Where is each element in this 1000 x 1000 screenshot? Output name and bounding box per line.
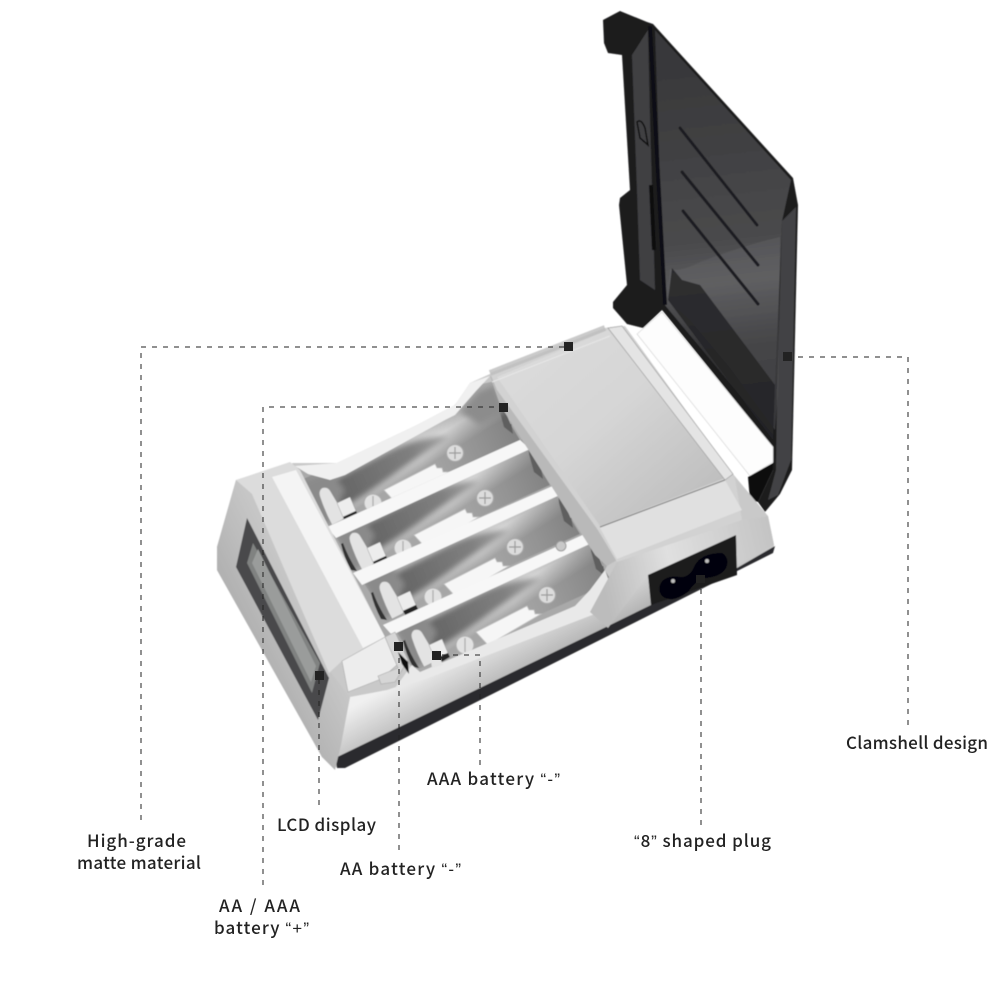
top wall	[295, 376, 490, 480]
callout: AA battery minus	[340, 642, 461, 880]
white contact tab lower-left	[430, 650, 443, 668]
battery wells	[295, 380, 612, 675]
icon: open clamshell lid	[603, 11, 798, 512]
callout: high-grade matte material: High-grade	[87, 827, 186, 852]
lower wall	[395, 570, 612, 688]
small screw	[556, 541, 566, 551]
white end band	[236, 462, 409, 692]
icon: charger body	[217, 326, 775, 770]
left face	[217, 480, 350, 770]
callout: LCD display	[277, 671, 377, 836]
right body end	[590, 516, 774, 628]
white hinge strip	[637, 312, 773, 476]
callout: AAA battery minus: AAA battery “-”	[427, 765, 560, 790]
callout: 8 shaped plug: “8” shaped plug	[634, 827, 771, 852]
dark base strip	[335, 546, 775, 768]
charger product illustration	[217, 11, 798, 770]
callout: clamshell design: Clamshell design	[846, 729, 988, 754]
callout: high-grade matte material: matte material	[77, 849, 201, 874]
callout: high-grade matte material	[77, 342, 573, 874]
callout: AA/AAA battery plus	[214, 403, 508, 939]
icon: figure-8 power socket	[648, 535, 737, 605]
callout: clamshell design	[783, 352, 988, 754]
well shadow at far end	[460, 385, 505, 425]
callout: AA/AAA battery plus: AA / AAA	[219, 892, 300, 917]
hinge clip	[748, 463, 773, 502]
callout: LCD display: LCD display	[277, 811, 377, 836]
callout: AAA battery minus	[427, 651, 560, 790]
battery compartment side strip	[490, 376, 617, 566]
icon: LCD display	[236, 518, 329, 720]
lower side surface	[335, 575, 651, 758]
callout: AA battery minus: AA battery “-”	[340, 855, 461, 880]
separator bars	[327, 440, 594, 635]
callout: 8 shaped plug	[634, 575, 771, 852]
top plate	[490, 326, 774, 628]
callout: AA/AAA battery plus: battery “+”	[214, 914, 309, 939]
